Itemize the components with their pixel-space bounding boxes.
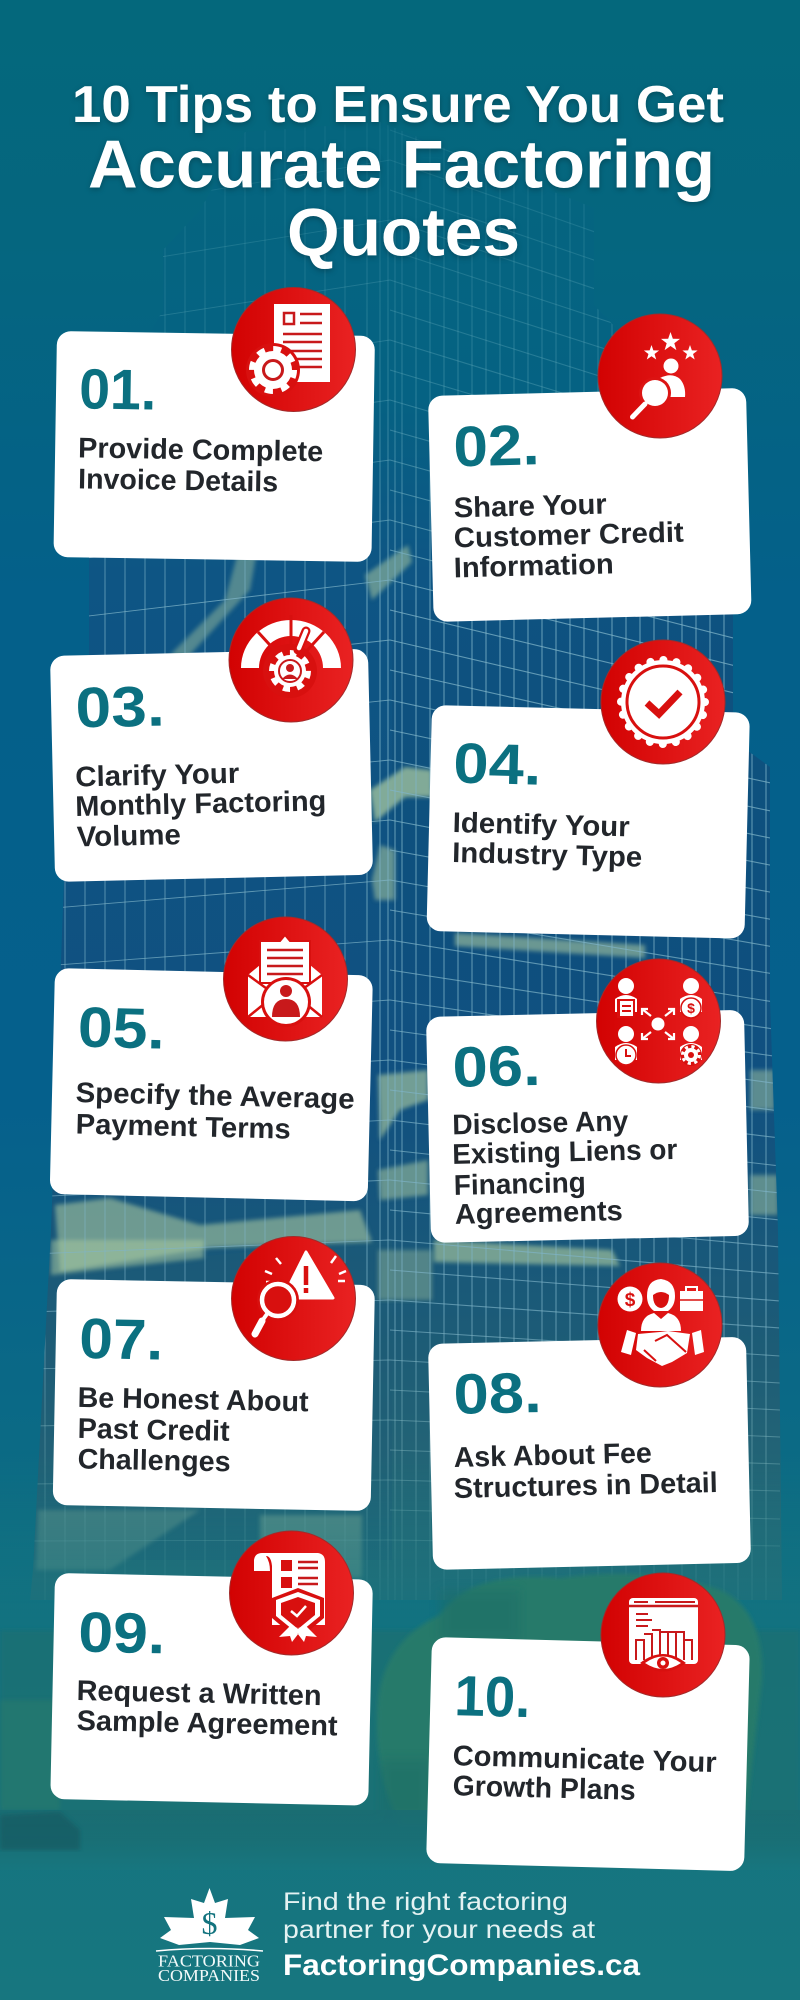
panel: tip 06: Disclose Any	[452, 1105, 629, 1141]
panel: tip 10: 10.	[454, 1664, 531, 1730]
panel: tip 06: Existing Liens or	[452, 1134, 678, 1171]
panel: tip 06: Agreements	[454, 1195, 623, 1231]
panel: tip 05	[50, 968, 373, 1201]
icon: people network: $	[687, 1000, 695, 1016]
logo: Factoring Companies: COMPANIES	[158, 1966, 260, 1985]
icon: advisor handshake: $	[625, 1290, 636, 1311]
icon: rated customer search	[598, 314, 722, 438]
panel: tip 03: Clarify Your	[75, 758, 240, 793]
panel: tip 07: 07.	[79, 1307, 164, 1373]
panel: tip 08: 08.	[453, 1361, 542, 1427]
icon: browser chart with eye	[601, 1573, 725, 1697]
icon: advisor handshake	[598, 1263, 722, 1387]
icon: document with gear	[232, 288, 356, 412]
panel: tip 04: Identify Your	[452, 807, 630, 843]
panel: tip 10: Communicate Your	[452, 1740, 717, 1779]
panel: tip 04	[426, 705, 750, 939]
panel: tip 04: 04.	[453, 732, 542, 798]
title	[72, 76, 724, 270]
panel: tip 07: Be Honest About	[77, 1382, 309, 1418]
panel: tip 05: 05.	[77, 996, 166, 1062]
panel: tip 02: Customer Credit	[453, 517, 685, 554]
street, trees and car	[0, 1450, 800, 1870]
panel: tip 09	[50, 1573, 373, 1806]
icon: gauge with gear	[229, 598, 353, 722]
panel: tip 07	[53, 1279, 375, 1511]
panel: tip 06	[426, 1010, 749, 1243]
panel: tip 03: Volume	[76, 819, 181, 853]
icon: scroll with shield	[230, 1531, 354, 1655]
panel: tip 02: Information	[453, 548, 614, 584]
panel: tip 01: Provide Complete	[78, 432, 323, 468]
footer call to action: partner for your needs at	[283, 1916, 595, 1944]
panel: tip 08: Ask About Fee	[453, 1437, 652, 1474]
panel: tip 01: 01.	[79, 357, 157, 423]
panel: tip 07: Past Credit	[77, 1413, 230, 1448]
icon: warning with magnifier	[232, 1236, 356, 1360]
panel: tip 05: Specify the Average	[75, 1077, 355, 1116]
panel: tip 07: Challenges	[77, 1443, 231, 1478]
panel: tip 10	[426, 1637, 750, 1871]
title: 10 Tips to Ensure You Get	[72, 76, 724, 134]
footer call to action	[283, 1888, 640, 1982]
logo: Factoring Companies: $	[202, 1905, 218, 1941]
panel: tip 06: 06.	[452, 1034, 541, 1100]
panel: tip 08	[428, 1337, 751, 1570]
footer call to action: Find the right factoring	[283, 1888, 568, 1916]
logo: Factoring Companies: FACTORING	[158, 1952, 260, 1970]
panel: tip 08: Structures in Detail	[453, 1467, 718, 1505]
icon: people network	[596, 959, 720, 1083]
panel: tip 03: 03.	[75, 674, 165, 740]
panel: tip 05: Payment Terms	[75, 1109, 291, 1146]
panel: tip 04: Industry Type	[452, 837, 643, 874]
panel: tip 09: 09.	[78, 1601, 166, 1666]
icon: verified badge	[601, 640, 725, 764]
title: Accurate Factoring	[88, 126, 715, 202]
panel: tip 06: Financing	[453, 1167, 586, 1202]
panel: tip 01: Invoice Details	[78, 463, 278, 498]
footer call to action: FactoringCompanies.ca	[283, 1949, 640, 1982]
panel: tip 09: Sample Agreement	[76, 1705, 338, 1742]
panel: tip 02	[428, 388, 752, 622]
panel: tip 02: 02.	[453, 413, 540, 479]
panel: tip 03	[50, 649, 373, 882]
panel: tip 10: Growth Plans	[452, 1770, 636, 1807]
logo: Factoring Companies	[156, 1888, 263, 1985]
building photo backdrop	[0, 100, 800, 1620]
icon: envelope with document	[224, 917, 348, 1041]
panel: tip 02: Share Your	[453, 489, 607, 524]
panel: tip 01	[53, 331, 375, 562]
title: Quotes	[287, 194, 520, 270]
panel: tip 03: Monthly Factoring	[75, 785, 327, 823]
panel: tip 09: Request a Written	[76, 1675, 322, 1712]
